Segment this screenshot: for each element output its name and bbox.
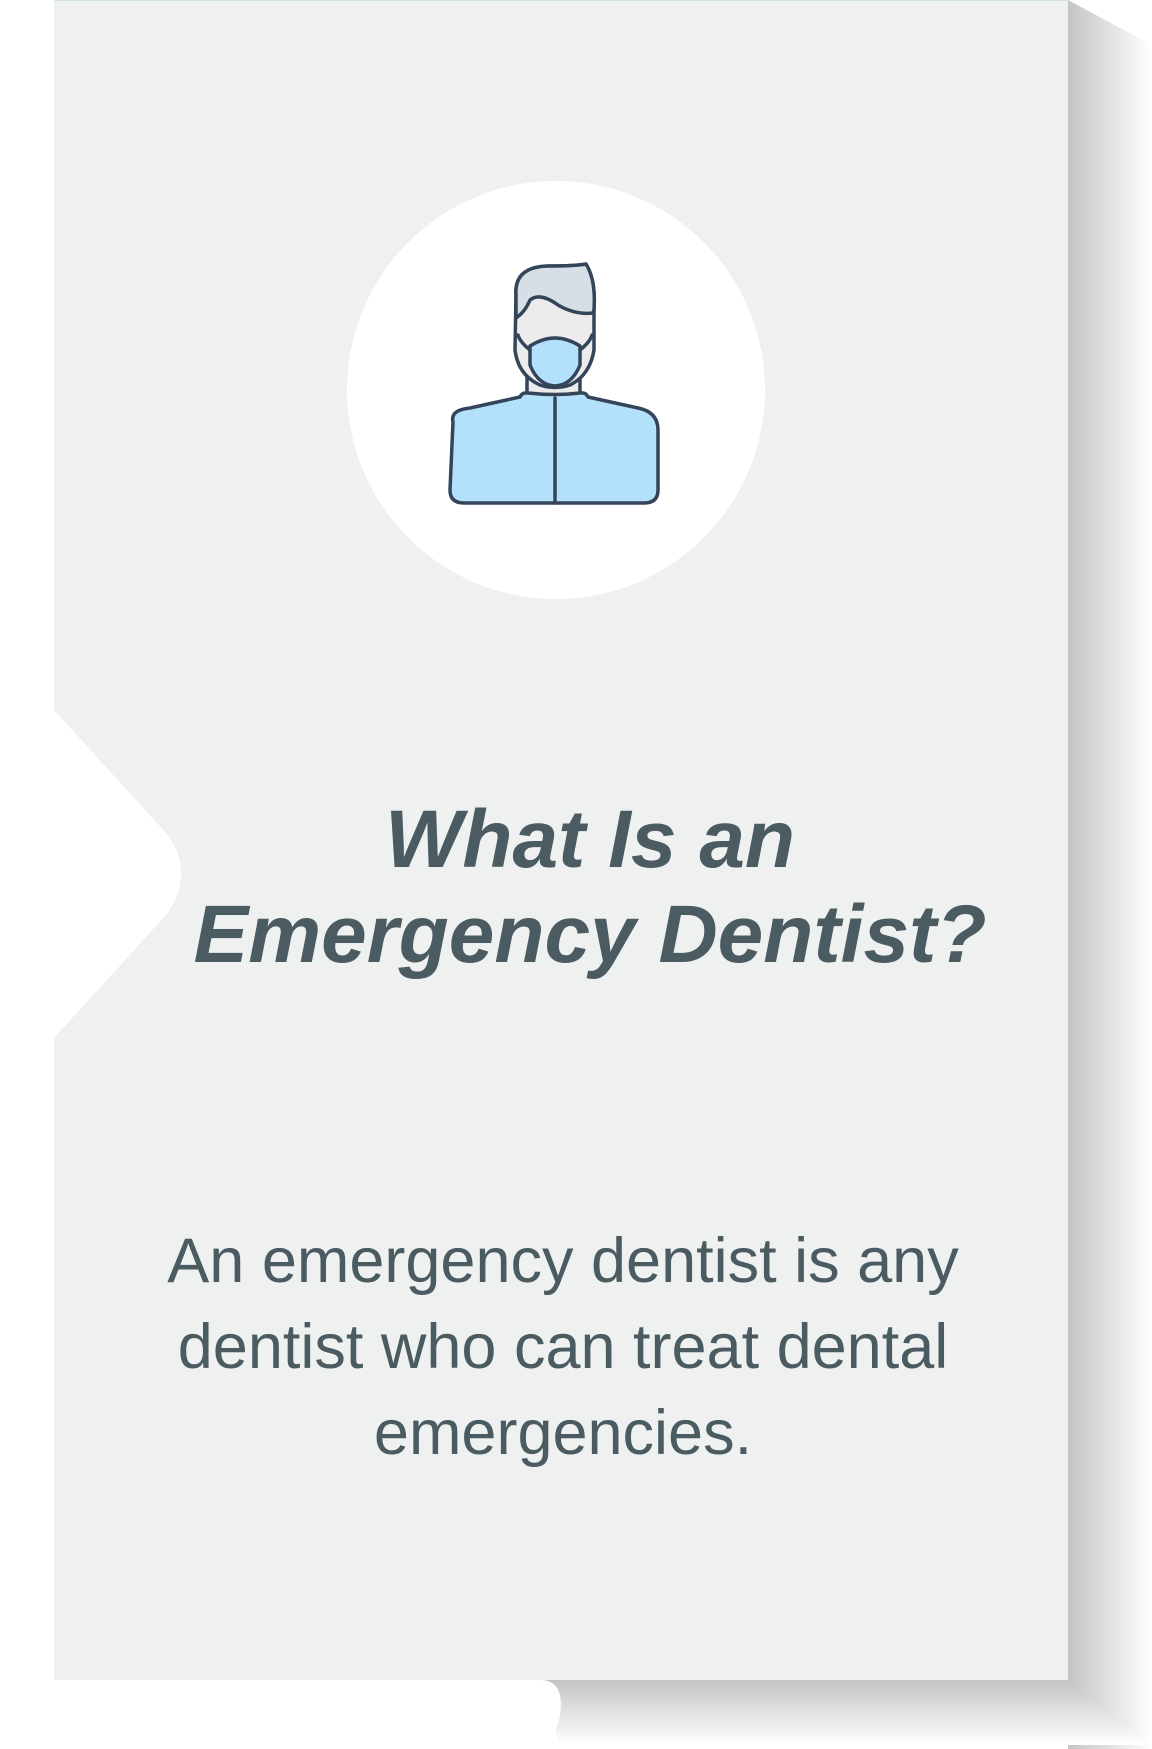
body text	[167, 1226, 959, 1468]
title	[194, 794, 986, 980]
icon: masked dentist	[450, 264, 658, 503]
body text: An emergency dentist is any	[167, 1226, 959, 1296]
title: What Is an	[385, 794, 795, 885]
body text: dentist who can treat dental	[178, 1312, 948, 1382]
body text: emergencies.	[374, 1398, 752, 1468]
icon circle with dentist	[347, 181, 765, 599]
title: Emergency Dentist?	[194, 889, 986, 980]
